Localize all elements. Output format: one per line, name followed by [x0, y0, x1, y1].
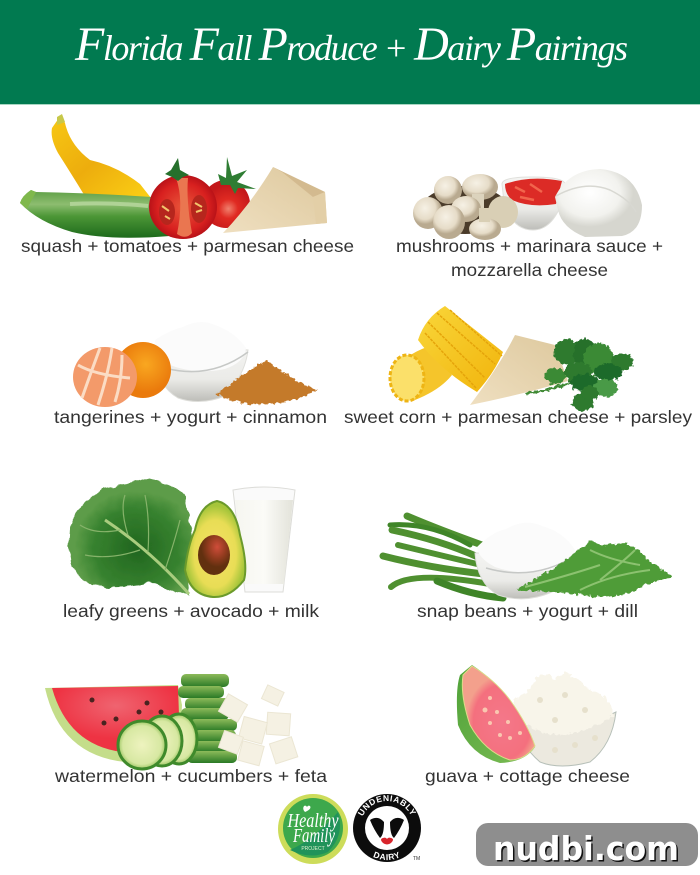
panel: mushrooms marinara mozzarella: [413, 169, 642, 240]
icon: cottage cheese bowl: [512, 672, 616, 766]
panel: watermelon cucumbers feta: [45, 674, 298, 769]
icon: orange: [115, 342, 171, 398]
panel: squash tomatoes parmesan: [20, 114, 327, 239]
icon: parmesan wedge: [223, 167, 327, 233]
logo: Healthy Family Project: Healthy: [287, 810, 339, 832]
icon: short corn cob: [390, 347, 452, 401]
panel: leafy greens avocado milk: [69, 478, 295, 597]
icon: cut tomato: [149, 158, 217, 239]
caption: squash tomatoes parmesan: squash + tomatoes + parmesan cheese: [21, 236, 354, 256]
icon: avocado half: [185, 501, 245, 597]
header band: [0, 0, 700, 105]
icon: marinara bowl: [502, 177, 565, 230]
icon: feta cubes: [218, 685, 298, 766]
icon: mozzarella: [555, 169, 642, 237]
icon: peeled tangerine: [73, 347, 137, 407]
icon: watermelon wedge: [45, 685, 182, 762]
caption: mushrooms marinara mozzarella: [396, 236, 663, 280]
logo: Undeniably Dairy: TM: [413, 856, 420, 862]
icon: back tomato: [202, 157, 256, 228]
watermark: nudbi.com: nudbi.com: [494, 830, 680, 870]
icon: yogurt bowl: [475, 523, 576, 599]
caption: mushrooms marinara mozzarella: mushrooms + marinara sauce +: [396, 236, 663, 256]
logo: Healthy Family Project: [278, 794, 348, 864]
icon: snap beans: [383, 516, 503, 598]
caption: snap beans yogurt dill: snap beans + yogurt + dill: [417, 601, 638, 621]
icon: yogurt bowl: [153, 322, 248, 402]
icon: cucumber slices: [118, 714, 197, 769]
watermark: nudbi.com: nudbi.com: [493, 829, 679, 868]
caption: corn parmesan parsley: sweet corn + parmesan cheese + parsley: [344, 407, 692, 427]
title: Florida Fall Produce + Dairy Pairings: [74, 18, 628, 71]
icon: zucchini: [20, 190, 170, 238]
icon: cucumber stack: [178, 674, 237, 763]
logo: Undeniably Dairy: DAIRY: [373, 852, 398, 860]
icon: guava half: [457, 665, 535, 763]
icon: long corn cob: [418, 306, 503, 392]
panel: guava cottage cheese: [457, 665, 616, 766]
panel: tangerines yogurt cinnamon: [73, 322, 318, 407]
icon: parmesan wedge: [470, 335, 568, 405]
icon: glass of milk: [233, 487, 295, 592]
icon: mushrooms: [413, 174, 518, 240]
caption: watermelon cucumbers feta: watermelon + cucumbers + feta: [54, 766, 327, 786]
panel: snap beans yogurt dill: [383, 516, 672, 599]
logo: Healthy Family Project: PROJECT: [301, 846, 325, 852]
caption: leafy greens avocado milk: leafy greens + avocado + milk: [63, 601, 319, 621]
icon: collard leaf: [69, 478, 192, 596]
caption: mushrooms marinara mozzarella: mozzarella cheese: [451, 260, 608, 280]
icon: parsley: [526, 339, 633, 411]
caption: tangerines yogurt cinnamon: tangerines + yogurt + cinnamon: [54, 407, 327, 427]
logo: Undeniably Dairy: [353, 794, 421, 862]
logo: Healthy Family Project: Family: [292, 825, 335, 847]
logo: Undeniably Dairy: UNDENIABLY: [358, 795, 416, 816]
panel: corn parmesan parsley: [390, 306, 633, 411]
icon: dill: [515, 541, 672, 597]
icon: yellow squash: [52, 114, 151, 198]
icon: cinnamon pile: [217, 360, 318, 404]
caption: guava cottage cheese: guava + cottage cheese: [425, 766, 630, 786]
